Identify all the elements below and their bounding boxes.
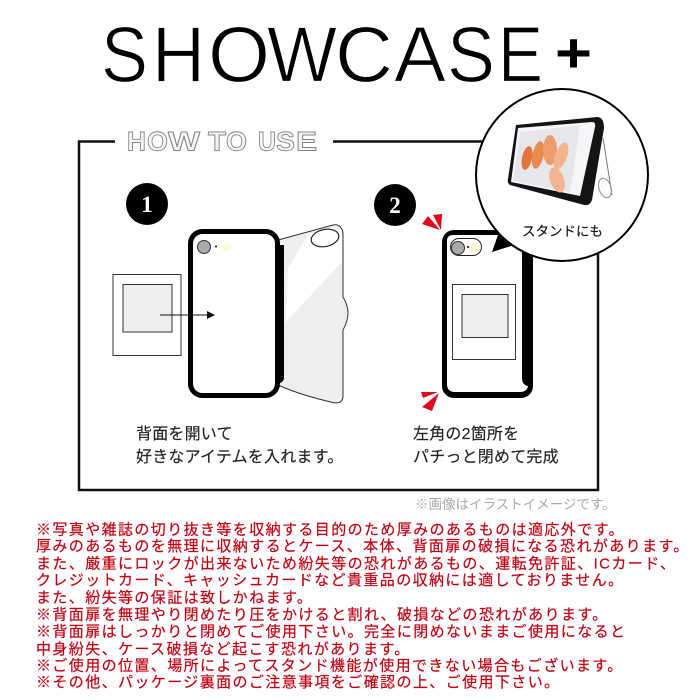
icon: red burst top	[422, 214, 442, 230]
text: step 2: 左角の2箇所を	[413, 425, 519, 443]
text: red cautions: クレジットカード、キャッシュカードなど貴重品の収納には適しておりません。	[36, 572, 624, 589]
title: S	[447, 10, 495, 98]
heading: how to use: E	[296, 126, 317, 156]
text: red cautions	[36, 520, 690, 691]
title: W	[267, 10, 337, 98]
note: illustration image: ※画像はイラストイメージです。	[415, 497, 616, 512]
text: red cautions: ※写真や雑誌の切り抜き等を収納する目的のため厚みのあるものは適応外です。	[36, 520, 625, 538]
heading: how to use: T	[208, 126, 227, 156]
icon: photo card	[113, 274, 181, 356]
text: red cautions: ※背面扉はしっかりと閉めてご使用下さい。完全に閉めないままご使用になると	[36, 624, 626, 640]
text: red cautions: また、紛失等の保証は致しかねます。	[36, 588, 313, 606]
text: red cautions: ※背面扉を無理やり閉めたり圧をかけると割れ、破損などの恐れがあります。	[36, 606, 609, 624]
title	[101, 10, 592, 98]
panel: step 2	[374, 184, 559, 466]
badge: step 1	[126, 183, 168, 225]
title: C	[335, 10, 393, 98]
text: red cautions: また、厳重にロックが出来ないため紛失等の恐れがあるもの、運転免許証、ICカード、	[36, 554, 676, 572]
heading: how to use: O	[226, 126, 247, 156]
title: A	[394, 10, 446, 98]
title: E	[498, 10, 543, 98]
badge: step 2: 2	[389, 193, 401, 218]
text: red cautions: 中身紛失、ケース破損など起こす恐れがあります。	[36, 641, 411, 658]
badge: step 1: 1	[141, 192, 153, 217]
title: S	[101, 10, 148, 98]
text: red cautions: 厚みのあるものを無理に収納するとケース、本体、背面扉の破損になる恐れがあります。	[36, 538, 690, 555]
title: +	[555, 21, 592, 84]
text: red cautions: ※その他、パッケージ裏面のご注意事項をご確認の上、ご使用下さい。	[36, 674, 561, 691]
text: stand label: スタンドにも	[522, 224, 603, 239]
icon: photo card in phone	[452, 284, 516, 360]
text: step 1: 背面を開いて	[136, 425, 233, 443]
heading: how to use: O	[147, 126, 168, 156]
heading: how to use: W	[168, 126, 201, 156]
icon: open back door	[278, 225, 348, 403]
text: red cautions: ※ご使用の位置、場所によってスタンド機能が使用できない場合もございます。	[36, 656, 624, 674]
text: step 1	[136, 425, 343, 466]
bubble tail	[492, 232, 530, 252]
heading: how to use: H	[127, 126, 146, 156]
heading: how to use: U	[258, 126, 276, 156]
text: step 2: パチっと閉めて完成	[413, 448, 559, 466]
icon: phone on stand	[508, 117, 614, 205]
heading: how to use: S	[276, 126, 295, 156]
icon: phone back	[190, 232, 284, 396]
arrow: insert card	[160, 311, 215, 319]
panel: step 1	[113, 183, 348, 466]
text: step 1: 好きなアイテムを入れます。	[136, 448, 343, 466]
bubble circle	[476, 89, 648, 261]
icon: red burst bottom	[421, 392, 439, 411]
icon: closed phone	[442, 230, 533, 398]
title: H	[152, 10, 205, 98]
panel: how to use frame	[79, 142, 598, 490]
callout: stand	[476, 89, 648, 261]
heading: how to use	[127, 126, 317, 156]
badge: step 2	[374, 184, 416, 226]
title: O	[208, 10, 270, 98]
text: step 2	[413, 425, 559, 466]
